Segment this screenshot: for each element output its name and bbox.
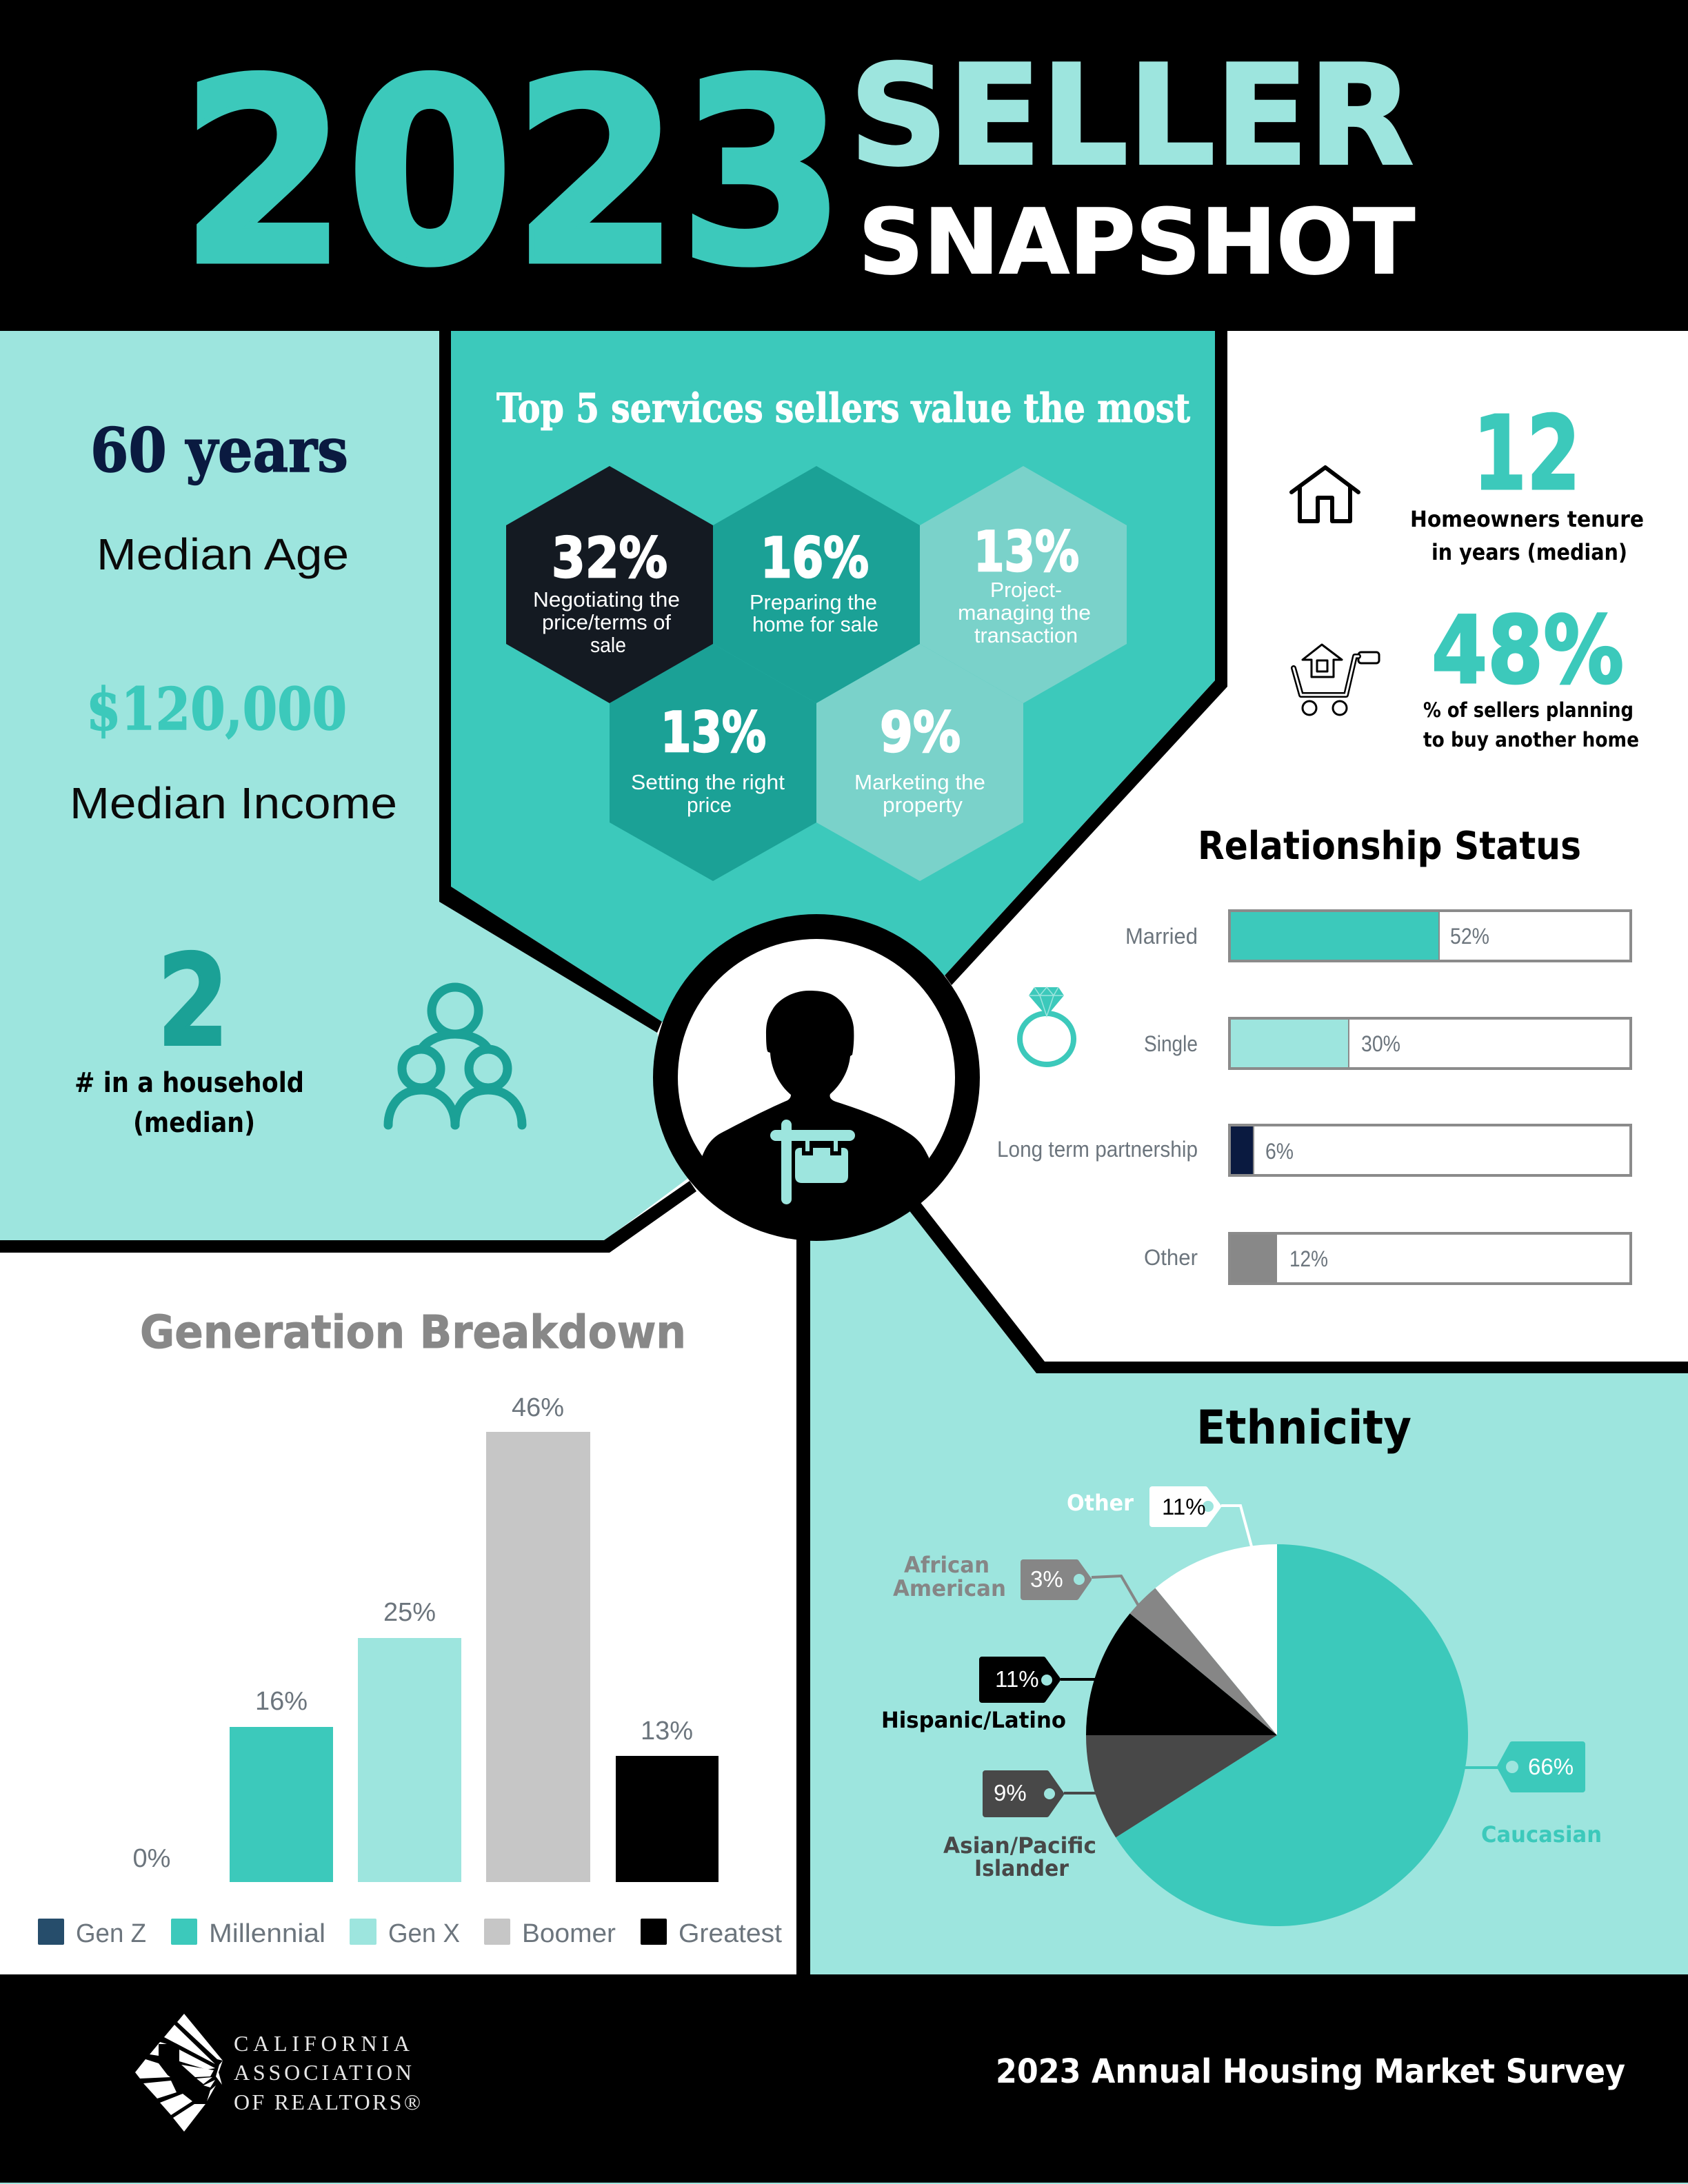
callout: caucasian bbox=[1465, 1744, 1602, 1848]
icon: hanging sign bbox=[770, 1120, 855, 1204]
legend: generations: Boomer bbox=[522, 1919, 616, 1948]
stat: 13 percent project managing: managing the bbox=[958, 600, 1091, 625]
callout: caucasian: 66% bbox=[1528, 1754, 1574, 1779]
callout: asian pacific islander: Asian/Pacific bbox=[943, 1832, 1096, 1859]
stat: 13 percent setting price: Setting the right bbox=[631, 770, 785, 794]
pie chart: ethnicity bbox=[1086, 1544, 1468, 1926]
bar: single bbox=[1144, 1018, 1631, 1069]
stat: 9 percent: 9% bbox=[880, 700, 961, 765]
legend: generations bbox=[38, 1919, 782, 1948]
label: median income: Median Income bbox=[70, 778, 397, 828]
label: tenure line two: in years (median) bbox=[1431, 539, 1627, 565]
stat: 13 percent setting price bbox=[631, 700, 785, 817]
callout: hispanic latino: Hispanic/Latino bbox=[881, 1707, 1066, 1733]
panel: relationship status bbox=[997, 824, 1631, 1284]
logo: wordmark: ASSOCIATION bbox=[234, 2060, 412, 2085]
bar chart: generations bbox=[133, 1393, 719, 1882]
logo: california association of realtors mark bbox=[135, 2014, 223, 2132]
icon: house in cart bbox=[1294, 645, 1379, 715]
label: household line two: (median) bbox=[133, 1107, 255, 1139]
stat: 13 percent setting price: price bbox=[687, 793, 732, 817]
callout: other bbox=[1067, 1489, 1252, 1546]
stat: 9 percent: Marketing the bbox=[854, 770, 985, 794]
icon: diamond ring bbox=[1020, 987, 1074, 1064]
stat: buy another home value: 48% bbox=[1431, 596, 1624, 705]
label: planning line two: to buy another home bbox=[1423, 728, 1639, 751]
heading: relationship status: Relationship Status bbox=[1198, 824, 1581, 869]
logo: wordmark: OF REALTORS® bbox=[234, 2090, 421, 2114]
stat: median age value: 60 years bbox=[90, 414, 348, 486]
stat: 13 percent project managing: Project- bbox=[990, 578, 1062, 602]
stat: median income value: $120,000 bbox=[86, 675, 347, 743]
stat: 13 percent project managing: 13% bbox=[974, 520, 1079, 584]
icon: house bbox=[1292, 467, 1358, 521]
callout: caucasian: Caucasian bbox=[1481, 1821, 1602, 1848]
bar: other: 12% bbox=[1289, 1246, 1328, 1271]
legend: generations: Gen Z bbox=[76, 1919, 146, 1948]
stat: 32 percent bbox=[533, 526, 680, 657]
callout: african american: 3% bbox=[1030, 1566, 1063, 1592]
heading: generation breakdown: Generation Breakdown bbox=[140, 1306, 686, 1359]
icon: people bbox=[388, 987, 522, 1125]
stat: 13 percent setting price: 13% bbox=[661, 700, 766, 765]
bar: long term partnership: 6% bbox=[1265, 1139, 1294, 1164]
stat: 16 percent bbox=[750, 526, 878, 636]
bar: married: Married bbox=[1125, 924, 1198, 949]
bar chart: generations: 16% bbox=[255, 1687, 308, 1716]
stat: 13 percent project managing bbox=[958, 520, 1091, 647]
hexagon: marketing bbox=[816, 644, 1023, 881]
bar: single: Single bbox=[1144, 1031, 1198, 1056]
bar: long term partnership: Long term partnership bbox=[997, 1137, 1198, 1162]
panel: top 5 services background bbox=[451, 331, 1215, 1103]
legend: generations: Gen X bbox=[388, 1919, 460, 1948]
panel: generation breakdown bbox=[38, 1306, 782, 1948]
stat: 16 percent: Preparing the bbox=[750, 590, 877, 614]
hexagon: setting price bbox=[610, 644, 816, 881]
title: 2023: 2023 bbox=[181, 27, 845, 321]
stat: 13 percent project managing: transaction bbox=[974, 623, 1078, 647]
label: tenure line one: Homeowners tenure bbox=[1410, 506, 1644, 532]
heading: ethnicity: Ethnicity bbox=[1196, 1401, 1411, 1455]
callout: hispanic latino bbox=[881, 1659, 1096, 1733]
title: SELLER: SELLER bbox=[850, 36, 1414, 196]
bar chart: generations: 0% bbox=[133, 1844, 170, 1873]
stat: 9 percent bbox=[854, 700, 985, 817]
bar: long term partnership bbox=[997, 1125, 1631, 1175]
hexagon: project managing bbox=[920, 466, 1127, 703]
bar: other: Other bbox=[1144, 1245, 1198, 1270]
logo: wordmark: CALIFORNIA bbox=[234, 2031, 410, 2056]
bar: married bbox=[1125, 911, 1631, 961]
label: planning line one: % of sellers planning bbox=[1423, 698, 1634, 722]
label: household line one: # in a household bbox=[74, 1067, 304, 1099]
bar chart: generations: 46% bbox=[512, 1393, 564, 1422]
black divider frame bbox=[0, 331, 1688, 1975]
stat: 32 percent: sale bbox=[590, 633, 626, 657]
bar chart: generations: 25% bbox=[383, 1598, 436, 1627]
stat: 32 percent: price/terms of bbox=[542, 610, 671, 634]
callout: other: 11% bbox=[1162, 1494, 1206, 1519]
label: median age: Median Age bbox=[97, 529, 349, 579]
bar: other bbox=[1144, 1233, 1631, 1284]
callout: hispanic latino: 11% bbox=[995, 1666, 1039, 1692]
bar: single: 30% bbox=[1361, 1031, 1400, 1056]
callout: african american bbox=[893, 1552, 1138, 1606]
bar chart: generations: 13% bbox=[641, 1717, 693, 1746]
panel: ethnicity bbox=[881, 1401, 1602, 1926]
stat: 32 percent: Negotiating the bbox=[533, 587, 680, 611]
panel: left demographics text bbox=[70, 414, 522, 1139]
central badge: seller with sign bbox=[653, 914, 980, 1241]
callout: asian pacific islander: 9% bbox=[994, 1780, 1027, 1806]
callout: african american: American bbox=[893, 1575, 1006, 1601]
stat: tenure value: 12 bbox=[1473, 394, 1580, 513]
title: SNAPSHOT: SNAPSHOT bbox=[858, 190, 1415, 294]
panel: ethnicity background bbox=[810, 1203, 1688, 1974]
callout: african american: African bbox=[904, 1552, 989, 1578]
callout: other: Other bbox=[1067, 1490, 1134, 1516]
heading: top 5 services: Top 5 services sellers value the most bbox=[496, 385, 1190, 432]
bar: married: 52% bbox=[1450, 924, 1489, 949]
callout: asian pacific islander: Islander bbox=[974, 1855, 1069, 1881]
stat: 32 percent: 32% bbox=[552, 526, 667, 590]
legend: generations: Millennial bbox=[209, 1919, 325, 1948]
stat: 16 percent: home for sale bbox=[752, 612, 878, 636]
panel: homeowner stats bbox=[1292, 394, 1644, 751]
callout: asian pacific islander bbox=[943, 1773, 1096, 1881]
panel: left demographics background bbox=[0, 331, 696, 1241]
hexagon: negotiating bbox=[506, 466, 713, 703]
stat: 9 percent: property bbox=[883, 793, 963, 817]
footer source text: 2023 Annual Housing Market Survey bbox=[996, 2052, 1625, 2091]
stat: household size: 2 bbox=[157, 928, 229, 1074]
icon: person silhouette bbox=[702, 991, 929, 1220]
hexagon: preparing home bbox=[713, 466, 920, 703]
legend: generations: Greatest bbox=[679, 1919, 782, 1948]
stat: 16 percent: 16% bbox=[761, 526, 869, 590]
logo: wordmark bbox=[234, 2031, 421, 2114]
header band bbox=[0, 0, 1688, 331]
panel: top 5 services bbox=[496, 385, 1190, 881]
footer band bbox=[0, 1974, 1688, 2183]
